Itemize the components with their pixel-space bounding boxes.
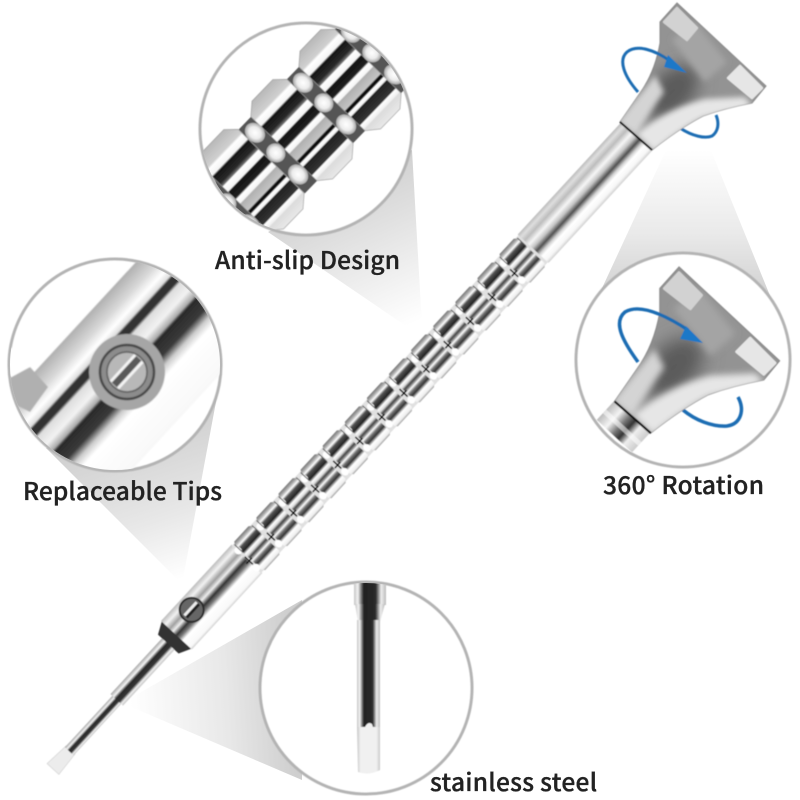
front blue arc: [680, 115, 718, 137]
thin shaft: [65, 694, 123, 755]
screw socket: [88, 332, 166, 410]
blue arrow tip: [664, 55, 687, 73]
blue arrow over head: [623, 48, 670, 92]
barrel with screw close-up: [10, 262, 220, 470]
label: 360 rotation: 360° Rotation: [603, 467, 764, 502]
blue arrow tip: [680, 326, 703, 343]
flared head: [612, 267, 780, 435]
panel: 360 rotation close-up circle: [576, 253, 790, 467]
dark collar: [153, 620, 193, 658]
label: replaceable tips: Replaceable Tips: [23, 473, 222, 508]
panel: replaceable tips close-up circle: [7, 257, 223, 473]
shaft, barrel and grip: [38, 122, 652, 783]
lower barrel: [161, 545, 262, 649]
barrel stripes: [20, 262, 220, 470]
panel: anti-slip close-up circle: [198, 21, 414, 237]
blue arrow over head: [619, 309, 688, 362]
thick shaft: [111, 635, 177, 706]
knurled grip: [229, 234, 549, 576]
head close-up: [597, 267, 780, 452]
flared screwdriver head: [618, 3, 766, 152]
upper barrel: [518, 122, 652, 263]
end chamfer: [10, 367, 48, 412]
vertical tip close-up: [354, 580, 386, 774]
callout cone: replaceable tips: [46, 375, 221, 584]
label: anti-slip design: Anti-slip Design: [215, 242, 400, 277]
label: stainless steel: stainless steel: [430, 764, 597, 799]
callout cone: stainless steel: [122, 600, 302, 780]
callout cone: anti-slip: [268, 150, 422, 326]
panel: stainless steel close-up circle: [260, 580, 472, 794]
callout cone: 360 rotation: [578, 148, 788, 340]
front blue arc: [683, 397, 741, 426]
lower barrel screw: [175, 593, 209, 627]
knurled grip close-up: [203, 28, 404, 230]
shaft stub: [597, 400, 650, 452]
flat blade tip: [47, 744, 77, 774]
